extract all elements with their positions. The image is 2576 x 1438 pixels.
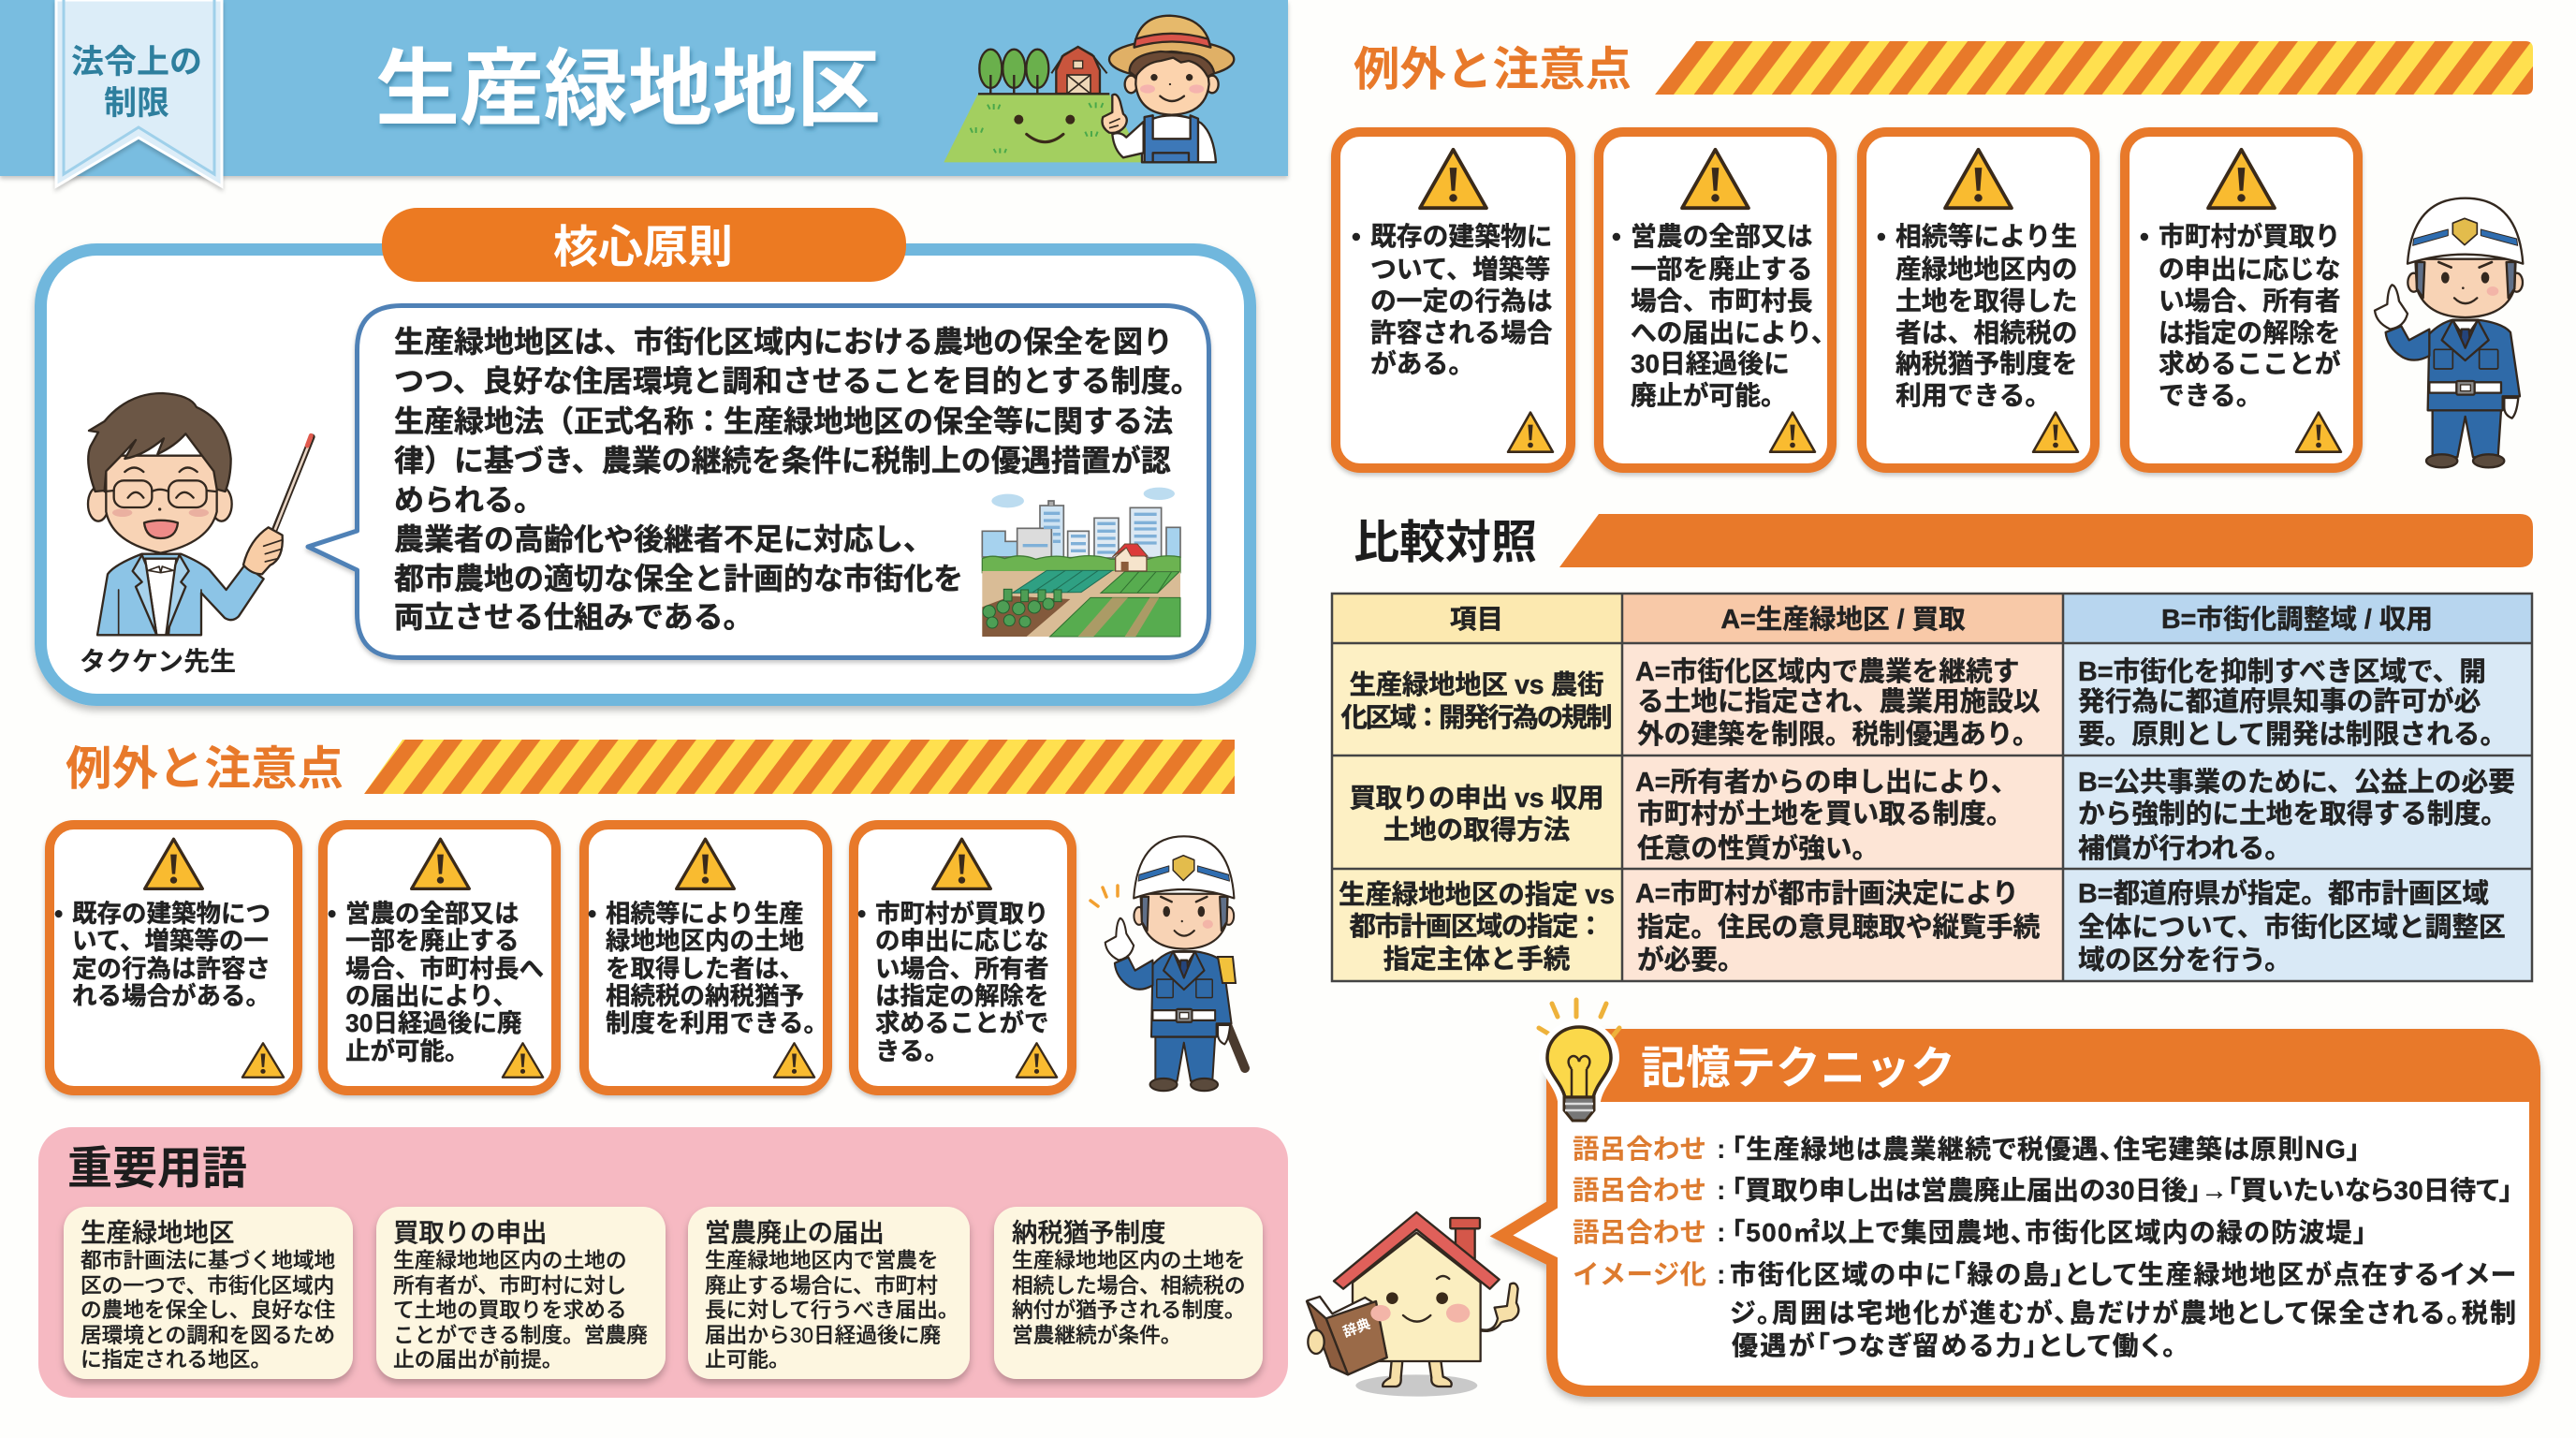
table row 2 bbox=[1350, 768, 2515, 864]
illustration: city and farmland bbox=[982, 488, 1180, 637]
term: 生産緑地地区: 都市計画法に基づく地域地 bbox=[80, 1248, 335, 1272]
ribbon: 法令上の制限: 制限 bbox=[104, 85, 169, 122]
card: 買取りの申出: の申出に応じな bbox=[875, 927, 1048, 955]
card: 既存の建築物: • bbox=[1352, 222, 1361, 251]
row: 語呂合わせ 3: 語呂合わせ bbox=[1573, 1218, 1706, 1248]
card: 相続等 bbox=[1862, 132, 2095, 468]
row: イメージ化: 市街化区域の中に「緑の島」として生産緑地地区が点在するイメー bbox=[1730, 1259, 2516, 1289]
term: 買取りの申出: 買取りの申出 bbox=[393, 1218, 547, 1247]
speech bubble: core principle text: められる。 bbox=[394, 483, 544, 517]
icon: house mascot with book bbox=[1307, 1212, 1518, 1397]
speech bubble: core principle text: 両立させる仕組みである。 bbox=[394, 600, 754, 634]
row: 語呂合わせ 3: : bbox=[1717, 1218, 1726, 1248]
card: 営農の廃止: 一部を廃止する bbox=[345, 927, 519, 955]
term: 納税猶予制度 bbox=[994, 1207, 1263, 1379]
card: 営農の廃止: • bbox=[1612, 222, 1621, 251]
heading: 例外と注意点 (right) bbox=[1354, 41, 2533, 95]
header band bbox=[0, 0, 1288, 186]
card: 既存の建築物: いて、増築等の一 bbox=[72, 927, 269, 955]
term: 営農廃止の届出: 生産緑地地区内で営農を bbox=[705, 1248, 939, 1272]
heading: 比較対照 bbox=[1354, 514, 2533, 568]
card: 既存の建築物 bbox=[50, 825, 298, 1091]
card: 相続等: • bbox=[1877, 222, 1886, 251]
panel: 重要用語 bbox=[38, 1127, 1288, 1398]
speech bubble: core principle text: 都市農地の適切な保全と計画的な市街化を bbox=[394, 562, 963, 595]
table row 1: A=市街化区域内で農業を継続す bbox=[1635, 657, 2019, 687]
speech bubble: core principle text: 生産緑地法（正式名称：生産緑地地区の保全等に関する法 bbox=[394, 404, 1173, 438]
card: 相続等: 者は、相続税の bbox=[1895, 318, 2078, 347]
table row 1: B=市街化を抑制すべき区域で、開 bbox=[2078, 657, 2486, 687]
card: 既存の建築物: がある。 bbox=[1370, 349, 1474, 378]
card: 既存の建築物: 既存の建築物につ bbox=[72, 900, 271, 928]
row: イメージ化 bbox=[1573, 1259, 2516, 1360]
card: 既存の建築物: 既存の建築物に bbox=[1370, 222, 1553, 251]
table row 2: 土地の取得方法 bbox=[1383, 815, 1570, 845]
card: 買取りの申出: • bbox=[857, 900, 866, 928]
card: 買取りの申出: 市町村が買取り bbox=[875, 900, 1048, 928]
term: 生産緑地地区: に指定される地区。 bbox=[80, 1347, 271, 1372]
card: 既存の建築物: 定の行為は許容さ bbox=[72, 955, 271, 983]
heading: 例外と注意点 (left) bbox=[66, 740, 1235, 795]
card: 相続等: 相続税の納税猶予 bbox=[606, 982, 804, 1010]
card: 相続等: を取得した者は、 bbox=[606, 955, 804, 983]
table row 2: 買取りの申出 vs 収用 bbox=[1350, 784, 1604, 814]
row: 語呂合わせ 1: 語呂合わせ bbox=[1573, 1135, 1706, 1165]
heading: 例外と注意点 (right): 例外と注意点 bbox=[1354, 44, 1632, 95]
table header row: B=市街化調整域 / 収用 bbox=[2161, 605, 2433, 635]
icon: house mascot with book: 辞典 bbox=[1340, 1315, 1373, 1341]
table row 3: A=市町村が都市計画決定により bbox=[1635, 878, 2019, 909]
table row 3: 全体について、市街化区域と調整区 bbox=[2078, 913, 2506, 943]
card: 相続等: 制度を利用できる。 bbox=[606, 1009, 828, 1037]
table row 3: 指定。住民の意見聴取や縦覧手続 bbox=[1637, 913, 2041, 943]
card: 既存の建築物: 許容される場合 bbox=[1370, 318, 1553, 347]
term: 買取りの申出 bbox=[376, 1207, 666, 1379]
term: 営農廃止の届出: 止可能。 bbox=[705, 1347, 790, 1372]
card: 既存の建築物 bbox=[1336, 132, 1571, 468]
table header row bbox=[1450, 605, 2433, 635]
card: 買取りの申出: 求めることがで bbox=[875, 1009, 1048, 1037]
table header row: A=生産緑地区 / 買取 bbox=[1720, 605, 1966, 635]
card: 買取りの申出 bbox=[2125, 132, 2358, 468]
heading: 重要用語: 重要用語 bbox=[67, 1144, 247, 1194]
table row 3: 生産緑地地区の指定 vs bbox=[1339, 880, 1615, 910]
header bar: 記憶テクニック: 記憶テクニック bbox=[1641, 1044, 1955, 1093]
table row 1: る土地に指定され、農業用施設以 bbox=[1637, 687, 2041, 717]
card: 買取りの申出: 市町村が買取り bbox=[2159, 222, 2341, 251]
term: 納税猶予制度: 営農継続が条件。 bbox=[1012, 1323, 1181, 1347]
heading: 比較対照: 比較対照 bbox=[1354, 518, 1537, 568]
card: 既存の建築物: ついて、増築等 bbox=[1370, 255, 1550, 284]
term: 納税猶予制度: 納付が猶予される制度。 bbox=[1012, 1298, 1246, 1322]
card: 買取りの申出: の申出に応じな bbox=[2159, 255, 2341, 284]
speech bubble: core principle text: つつ、良好な住居環境と調和させることを目的とする制度。 bbox=[394, 364, 1201, 398]
icon: guard (right) bbox=[2375, 198, 2523, 467]
row: 語呂合わせ 2: 「買取り申し出は営農廃止届出の30日後」→「買いたいなら30日待て」 bbox=[1732, 1176, 2512, 1205]
table row 3 bbox=[1339, 878, 2506, 976]
card: 相続等: 相続等により生産 bbox=[606, 900, 803, 928]
term: 生産緑地地区: 区の一つで、市街化区域内 bbox=[80, 1273, 334, 1298]
card: 買取りの申出: は指定の解除を bbox=[2159, 318, 2341, 347]
card: 既存の建築物: の一定の行為は bbox=[1370, 286, 1553, 315]
term: 納税猶予制度: 納税猶予制度 bbox=[1012, 1218, 1165, 1247]
icon: light bulb bbox=[1539, 1000, 1619, 1121]
ribbon: 法令上の制限: 法令上の bbox=[71, 44, 202, 81]
ribbon: 法令上の制限 bbox=[56, 0, 222, 186]
term: 営農廃止の届出: 営農廃止の届出 bbox=[705, 1218, 885, 1247]
table row 2: から強制的に土地を取得する制度。 bbox=[2078, 800, 2508, 829]
table row 3: が必要。 bbox=[1637, 945, 1745, 976]
card: 相続等: 相続等により生 bbox=[1895, 222, 2077, 251]
term: 営農廃止の届出: 届出から30日経過後に廃 bbox=[705, 1323, 941, 1347]
table row 2: 任意の性質が強い。 bbox=[1637, 833, 1879, 864]
table row 3: 指定主体と手続 bbox=[1383, 945, 1571, 975]
term: 買取りの申出: 止の届出が前提。 bbox=[393, 1347, 564, 1372]
card: 営農の廃止: 場合、市町村長 bbox=[1631, 286, 1813, 315]
row: 語呂合わせ 1: : bbox=[1717, 1135, 1726, 1165]
warning cards (left) bbox=[50, 825, 1072, 1091]
panel: 記憶テクニック bbox=[1501, 1000, 2540, 1391]
panel: 核心原則 bbox=[41, 208, 1251, 700]
card: 買取りの申出: きる。 bbox=[875, 1037, 949, 1065]
term: 納税猶予制度: 相続した場合、相続税の bbox=[1012, 1273, 1246, 1298]
table row 2: B=公共事業のために、公益上の必要 bbox=[2078, 768, 2515, 798]
card: 営農の廃止: への届出により、 bbox=[1631, 318, 1837, 347]
table row 2: 補償が行われる。 bbox=[2078, 833, 2291, 864]
speech bubble: core principle text: 農業者の高齢化や後継者不足に対応し、 bbox=[394, 522, 933, 556]
row: 語呂合わせ 2: 語呂合わせ bbox=[1573, 1176, 1706, 1206]
term: 納税猶予制度: 生産緑地地区内の土地を bbox=[1012, 1248, 1246, 1272]
table header row: 項目 bbox=[1450, 605, 1503, 635]
table row 3: 域の区分を行う。 bbox=[2078, 946, 2291, 976]
card: 買取りの申出: 求めるこことが bbox=[2159, 349, 2341, 378]
icon: smiling hill with barn, trees and farmer bbox=[944, 16, 1234, 162]
card: 相続等: 産緑地地区内の bbox=[1895, 255, 2078, 284]
table row 1: 発行為に都道府県知事の許可が必 bbox=[2078, 686, 2481, 717]
speech bubble: core principle text: 生産緑地地区は、市街化区域内における農地の保全を図り bbox=[394, 325, 1173, 359]
table row 1 bbox=[1340, 657, 2507, 750]
speech bubble: core principle text bbox=[308, 305, 1209, 657]
speech bubble: core principle text: 律）に基づき、農業の継続を条件に税制上の優遇措置が認 bbox=[394, 444, 1171, 477]
card: 営農の廃止 bbox=[323, 825, 556, 1091]
card: 営農の廃止 bbox=[1599, 132, 1837, 468]
card: 営農の廃止: 30日経過後に bbox=[1631, 349, 1790, 378]
table row 2: A=所有者からの申し出により、 bbox=[1635, 768, 2018, 798]
card: 既存の建築物: • bbox=[54, 900, 63, 928]
row: 語呂合わせ 3: 「500㎡以上で集団農地、市街化区域内の緑の防波堤」 bbox=[1732, 1218, 2366, 1247]
card: 相続等 bbox=[584, 825, 828, 1091]
term: 買取りの申出: て土地の買取りを求める bbox=[393, 1298, 627, 1322]
heading: 例外と注意点 (left): 例外と注意点 bbox=[66, 743, 344, 795]
term: 生産緑地地区: の農地を保全し、良好な住 bbox=[80, 1298, 335, 1322]
row: 語呂合わせ 1: 「生産緑地は農業継続で税優遇、住宅建築は原則NG」 bbox=[1732, 1135, 2360, 1164]
row: イメージ化: : bbox=[1717, 1260, 1726, 1290]
term: 買取りの申出: 所有者が、市町村に対し bbox=[393, 1273, 626, 1298]
row: イメージ化: イメージ化 bbox=[1573, 1260, 1706, 1290]
table row 1: 化区域：開発行為の規制 bbox=[1340, 703, 1612, 733]
card: 営農の廃止: 廃止が可能。 bbox=[1631, 381, 1787, 410]
card: 買取りの申出: い場合、所有者 bbox=[875, 955, 1048, 983]
table row 1: 生産緑地地区 vs 農街 bbox=[1350, 670, 1604, 700]
card: 相続等: • bbox=[588, 900, 596, 928]
row: イメージ化: ジ。周囲は宅地化が進むが、島だけが農地として保全される。税制 bbox=[1730, 1298, 2516, 1328]
card: 営農の廃止: 場合、市町村長へ bbox=[345, 955, 544, 983]
term: 営農廃止の届出: 長に対して行うべき届出。 bbox=[705, 1298, 959, 1322]
card: 買取りの申出: は指定の解除を bbox=[875, 982, 1048, 1010]
card: 相続等: 緑地地区内の土地 bbox=[606, 927, 804, 955]
term: 生産緑地地区 bbox=[64, 1207, 353, 1379]
card: 営農の廃止: 30日経過後に廃 bbox=[345, 1009, 522, 1037]
card: 営農の廃止: 営農の全部又は bbox=[345, 900, 519, 928]
icon: guard with baton (left) bbox=[1090, 836, 1245, 1091]
card: 営農の廃止: 一部を廃止する bbox=[1631, 255, 1813, 284]
table row 3: B=都道府県が指定。都市計画区域 bbox=[2078, 878, 2489, 909]
card: 買取りの申出 bbox=[854, 825, 1072, 1091]
card: 営農の廃止: 営農の全部又は bbox=[1631, 222, 1813, 251]
card: 既存の建築物: れる場合がある。 bbox=[72, 982, 271, 1010]
card: 相続等: 利用できる。 bbox=[1895, 381, 2051, 410]
card: 相続等: 土地を取得した bbox=[1895, 286, 2078, 315]
header bar: 記憶テクニック bbox=[1546, 1029, 2540, 1102]
term: 営農廃止の届出 bbox=[688, 1207, 970, 1379]
term: 買取りの申出: 生産緑地地区内の土地の bbox=[393, 1248, 627, 1272]
row: イメージ化: 優遇が「つなぎ留める力」として働く。 bbox=[1732, 1330, 2175, 1360]
card: 営農の廃止: • bbox=[328, 900, 336, 928]
card: 買取りの申出: い場合、所有者 bbox=[2159, 286, 2341, 315]
heading: 核心原則: 核心原則 bbox=[553, 223, 733, 272]
card: 営農の廃止: の届出により、 bbox=[345, 982, 518, 1010]
row: 語呂合わせ 2: : bbox=[1717, 1176, 1726, 1206]
card: 営農の廃止: 止が可能。 bbox=[345, 1037, 470, 1065]
term: 生産緑地地区: 生産緑地地区 bbox=[80, 1218, 234, 1247]
icon: teacher タクケン先生 bbox=[88, 393, 312, 635]
title: 生産緑地地区 bbox=[375, 43, 881, 137]
term: 生産緑地地区: 居環境との調和を図るため bbox=[80, 1323, 335, 1347]
comparison table bbox=[1331, 593, 2533, 982]
card: 買取りの申出: できる。 bbox=[2159, 381, 2262, 410]
table row 1: 外の建築を制限。税制優遇あり。 bbox=[1637, 720, 2040, 750]
label: タクケン先生: タクケン先生 bbox=[80, 647, 236, 676]
table row 2: 市町村が土地を買い取る制度。 bbox=[1637, 799, 2013, 829]
card: 買取りの申出: • bbox=[2140, 222, 2149, 251]
warning cards (right) bbox=[1336, 132, 2358, 468]
table row 1: 要。原則として開発は制限される。 bbox=[2078, 720, 2507, 750]
term: 営農廃止の届出: 廃止する場合に、市町村 bbox=[705, 1273, 938, 1298]
table row 3: 都市計画区域の指定： bbox=[1350, 912, 1604, 942]
card: 相続等: 納税猶予制度を bbox=[1895, 349, 2078, 378]
heading: 核心原則 bbox=[382, 208, 906, 282]
term: 買取りの申出: ことができる制度。営農廃 bbox=[393, 1323, 648, 1347]
